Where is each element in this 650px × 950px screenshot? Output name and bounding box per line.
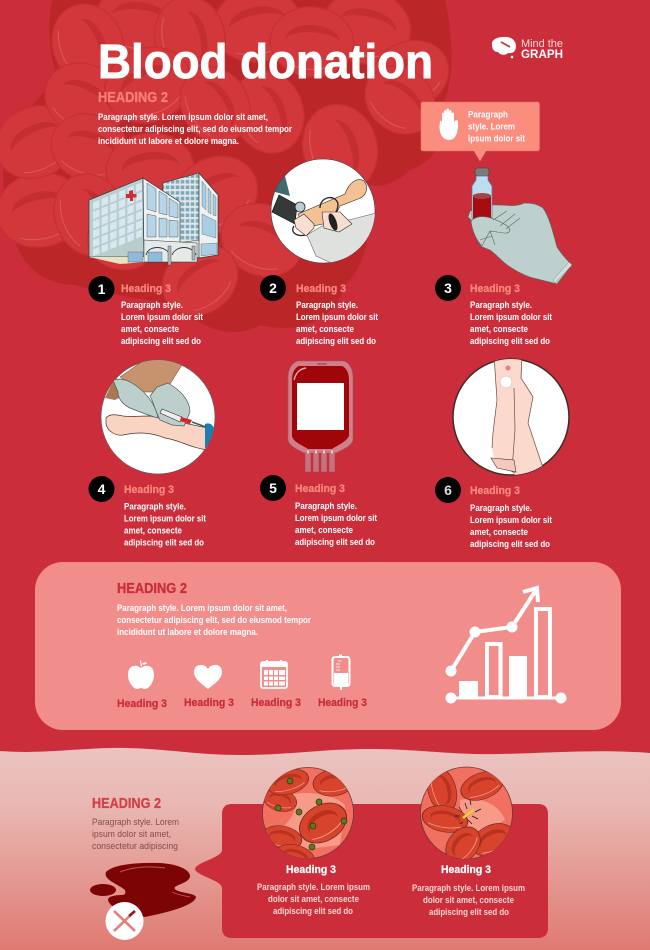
virus column: paragraph: Paragraph style. Lorem ipsum: [257, 882, 370, 892]
step 5: amet, consecte: [295, 525, 353, 535]
bottom paragraph: ipsum dolor sit amet,: [92, 829, 171, 839]
virus column: paragraph: [257, 882, 370, 916]
step 6: Paragraph style.: [470, 503, 532, 513]
step 2: Heading 3: [296, 283, 346, 295]
icon: cross badge: [106, 902, 144, 940]
number badge 3: 3: [444, 280, 452, 296]
step 4: Lorem ipsum dolor sit: [124, 514, 206, 524]
virus column: heading: Heading 3: [286, 864, 336, 876]
chart icon: rising bars and arrow: [446, 588, 566, 704]
illustration: blood pressure measurement: [268, 159, 376, 266]
intro paragraph: consectetur adipiscing elit, sed do eiusmod tempor: [98, 124, 292, 134]
panel paragraph: [117, 603, 311, 637]
callout: stop hand note: Paragraph: [468, 110, 508, 120]
step 1: Heading 3: [121, 283, 171, 295]
step 1: amet, consecte: [121, 324, 179, 334]
panel paragraph: consectetur adipiscing elit, sed do eiusmod tempor: [117, 615, 311, 625]
panel paragraph: Paragraph style. Lorem ipsum dolor sit amet,: [117, 603, 287, 613]
illustration: gloved hand holding blood vial: [468, 168, 572, 284]
number badge 4: 4: [98, 481, 106, 497]
title: Blood donation: [98, 36, 433, 89]
step 3: adipiscing elit sed do: [470, 336, 550, 346]
step 5: Lorem ipsum dolor sit: [295, 513, 377, 523]
panel heading: HEADING 2: [117, 581, 187, 597]
step 1: [88, 276, 203, 346]
step 3: Lorem ipsum dolor sit: [470, 312, 552, 322]
icon label: bag: Heading 3: [318, 697, 367, 709]
icon label: heart: Heading 3: [184, 697, 234, 709]
intro paragraph: [98, 112, 292, 146]
step 3: Paragraph style.: [470, 300, 532, 310]
step 1: adipiscing elit sed do: [121, 336, 201, 346]
step 1: Paragraph style.: [121, 300, 183, 310]
icon label: apple: Heading 3: [117, 698, 167, 710]
parasite column: paragraph: dolor sit amet, consecte: [423, 895, 514, 905]
bottom paragraph: consectetur adipiscing: [92, 841, 178, 851]
step 5: adipiscing elit sed do: [295, 537, 375, 547]
step 3: Heading 3: [470, 283, 520, 295]
bottom paragraph: Paragraph style. Lorem: [92, 817, 179, 827]
step 6: Lorem ipsum dolor sit: [470, 515, 552, 525]
virus column: paragraph: adipiscing elit sed do: [273, 906, 353, 916]
number badge 5: 5: [269, 480, 277, 496]
step 3: [435, 275, 552, 346]
step 2: Paragraph style.: [296, 300, 358, 310]
step 5: Heading 3: [295, 483, 345, 495]
step 6: amet, consecte: [470, 527, 528, 537]
intro paragraph: Paragraph style. Lorem ipsum dolor sit amet,: [98, 112, 268, 122]
callout: stop hand note: style. Lorem: [468, 122, 515, 132]
panel paragraph: incididunt ut labore et dolore magna.: [117, 627, 258, 637]
parasite column: paragraph: Paragraph style. Lorem ipsum: [412, 883, 525, 893]
background: red blood cells: [0, 0, 460, 332]
step 4: Heading 3: [124, 484, 174, 496]
step 4: amet, consecte: [124, 526, 182, 536]
bottom background wave: [0, 748, 650, 950]
illustration: blood bag: [288, 361, 353, 472]
icon: blood bag: [332, 654, 350, 690]
number badge 1: 1: [98, 281, 106, 297]
icon label: calendar: Heading 3: [251, 697, 301, 709]
parasite column: paragraph: adipiscing elit sed do: [429, 907, 509, 917]
illustration: blood puddle: [90, 863, 196, 917]
step 2: amet, consecte: [296, 324, 354, 334]
step 5: Paragraph style.: [295, 501, 357, 511]
illustration: hospital: [89, 173, 218, 265]
bottom heading: HEADING 2: [92, 796, 161, 812]
logo: Mind the Graph: Mind the: [521, 38, 563, 50]
panel: requirements: [35, 562, 621, 730]
step 2: [260, 275, 378, 346]
step 6: [435, 477, 552, 549]
step 2: Lorem ipsum dolor sit: [296, 312, 378, 322]
logo: Mind the Graph: [492, 37, 563, 61]
step 4: Paragraph style.: [124, 502, 186, 512]
step 6: adipiscing elit sed do: [470, 539, 550, 549]
step 6: Heading 3: [470, 485, 520, 497]
step 5: [260, 475, 377, 547]
virus column: paragraph: dolor sit amet, consecte: [268, 894, 359, 904]
illustration: viruses among red cells: [262, 767, 354, 859]
step 2: adipiscing elit sed do: [296, 336, 376, 346]
icon: calendar: [261, 660, 287, 688]
callout: stop hand note: [421, 102, 540, 161]
panel: infection risks: [195, 804, 548, 938]
parasite column: paragraph: [412, 883, 525, 917]
parasite column: heading: Heading 3: [441, 864, 491, 876]
step 3: amet, consecte: [470, 324, 528, 334]
icon: heart: [194, 665, 222, 689]
illustration: needle inserted in arm: [101, 358, 215, 474]
callout: stop hand note: ipsum dolor sit: [468, 134, 525, 144]
number badge 6: 6: [444, 482, 452, 498]
step 1: Lorem ipsum dolor sit: [121, 312, 203, 322]
step 4: [88, 476, 206, 548]
intro paragraph: incididunt ut labore et dolore magna.: [98, 136, 239, 146]
illustration: cotton on arm after donation: [453, 355, 569, 480]
bottom paragraph: [92, 817, 179, 851]
number badge 2: 2: [269, 280, 277, 296]
illustration: parasite among red cells: [420, 766, 513, 860]
intro heading: HEADING 2: [98, 90, 168, 106]
icon: hand: [440, 108, 458, 140]
icon: apple: [128, 660, 154, 689]
logo: Mind the Graph: GRAPH: [521, 47, 563, 61]
step 4: adipiscing elit sed do: [124, 538, 204, 548]
